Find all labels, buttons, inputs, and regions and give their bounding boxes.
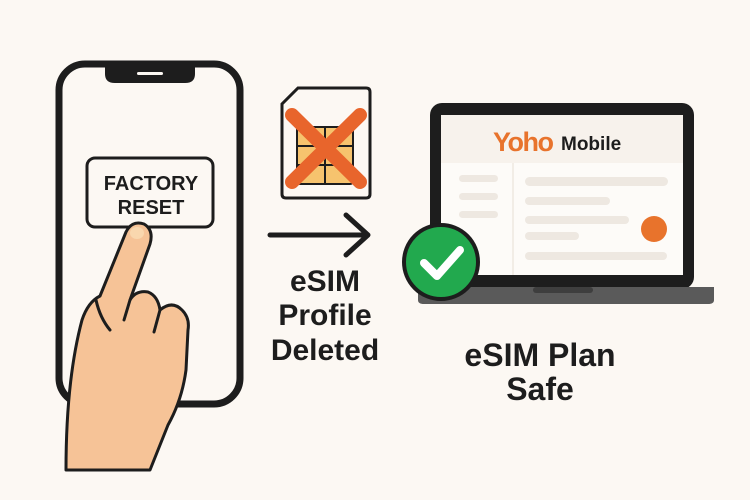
laptop [418, 103, 714, 304]
factory reset button: RESET [118, 197, 184, 219]
arrow [270, 215, 368, 255]
phone [59, 64, 240, 404]
yoho mobile logo: Mobile [561, 134, 621, 155]
text: eSIM Profile Deleted: eSIM [290, 265, 360, 298]
yoho mobile logo [493, 127, 621, 157]
yoho mobile logo: Yoho [493, 127, 553, 157]
factory reset button [87, 158, 213, 227]
hand [66, 223, 188, 470]
sim card crossed [282, 88, 370, 198]
text: eSIM Profile Deleted [271, 265, 379, 367]
text: eSIM Profile Deleted: Deleted [271, 334, 379, 367]
text: eSIM Profile Deleted: Profile [278, 299, 372, 332]
text: eSIM Plan Safe: Safe [506, 371, 574, 407]
text: eSIM Plan Safe [464, 337, 616, 407]
check badge [404, 225, 478, 299]
factory reset button: FACTORY [104, 173, 199, 195]
text: eSIM Plan Safe: eSIM Plan [464, 337, 616, 373]
